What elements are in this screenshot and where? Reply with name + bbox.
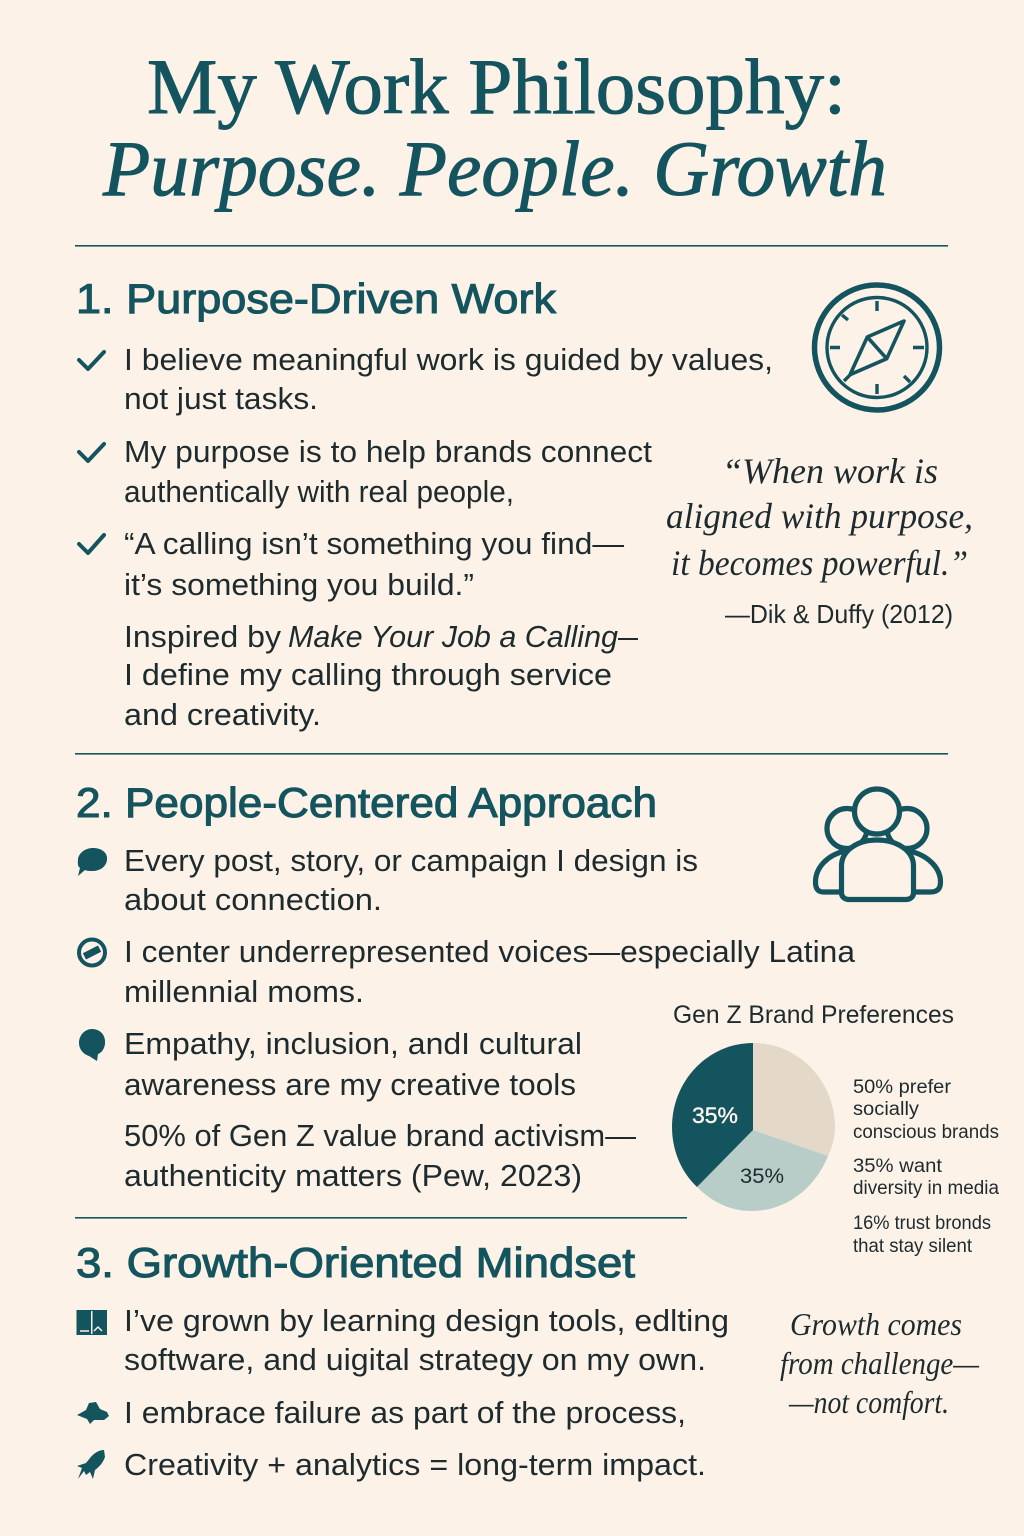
- callout: growth quote: [780, 1306, 979, 1420]
- text: bullet 3: [124, 526, 624, 602]
- text: bullet 1: [124, 342, 773, 416]
- pie label: white: 35%: [692, 1103, 738, 1128]
- legend: that stay silent: [853, 1236, 973, 1257]
- icon: book: [76, 1310, 107, 1335]
- legend: 16% trust bronds: [853, 1213, 991, 1234]
- text: bullet 3: “A calling isn’t something you find—: [124, 526, 624, 561]
- text: inspired by: [124, 619, 638, 732]
- text: bullet 1: not just tasks.: [124, 381, 318, 416]
- text: inspired by: —: [618, 619, 638, 654]
- icon: badge circle: [79, 940, 105, 966]
- icon: compass: [814, 285, 940, 410]
- chart: Gen Z brand preferences: [672, 1001, 999, 1257]
- heading: section 2: 2. People-Centered Approach: [76, 779, 657, 826]
- text: statistic: [124, 1118, 636, 1193]
- icon: plane: [77, 1402, 109, 1424]
- callout: growth quote: —not comfort.: [788, 1384, 949, 1420]
- icon: rocket: [77, 1450, 105, 1479]
- text: statistic: authenticity matters (Pew, 2023): [124, 1158, 582, 1193]
- callout: growth quote: Growth comes: [790, 1306, 962, 1342]
- icon: check 3: [79, 535, 104, 553]
- legend: conscious brands: [853, 1122, 999, 1143]
- icon: speech drop: [79, 1029, 105, 1061]
- text: bullet 2: I center underrepresented voices—especially Latina: [124, 934, 856, 969]
- text: bullet 2: My purpose is to help brands connect: [124, 434, 652, 469]
- callout: growth quote: from challenge—: [780, 1345, 979, 1381]
- icon: check 1: [79, 352, 104, 369]
- text: bullet 1: I’ve grown by learning design tools, edlting: [124, 1303, 729, 1338]
- callout: quote: [666, 451, 973, 629]
- text: bullet 1: [124, 1303, 729, 1377]
- pie slice: sage: [697, 1130, 828, 1211]
- heading: section 3: 3. Growth-Oriented Mindset: [76, 1239, 635, 1286]
- pie slice: teal: [672, 1043, 753, 1187]
- legend: 50% prefer: [853, 1077, 952, 1098]
- text: inspired by: and creativity.: [124, 697, 321, 732]
- callout: quote: “When work is: [722, 451, 938, 491]
- title: [102, 43, 887, 212]
- panel: people-centered approach: [76, 779, 999, 1257]
- text: inspired by: Inspired by: [124, 619, 282, 654]
- text: bullet 2: I embrace failure as part of the process,: [124, 1395, 686, 1430]
- text: bullet 1: I believe meaningful work is guided by values,: [124, 342, 773, 377]
- text: bullet 1: about connection.: [124, 882, 382, 917]
- text: bullet 3: Creativity + analytics = long-term impact.: [124, 1447, 706, 1482]
- text: bullet 2: millennial moms.: [124, 974, 364, 1009]
- text: bullet 3: Empathy, inclusion, andI cultural: [124, 1026, 582, 1061]
- icon: speech bubble: [78, 848, 107, 876]
- legend: socially: [853, 1099, 920, 1120]
- panel: purpose-driven work: [76, 275, 973, 732]
- legend: 35% want: [853, 1156, 943, 1177]
- text: bullet 2: [124, 934, 856, 1009]
- text: statistic: 50% of Gen Z value brand activism—: [124, 1118, 636, 1153]
- callout: quote: —Dik & Duffy (2012): [725, 599, 953, 629]
- text: bullet 1: [124, 843, 698, 917]
- text: bullet 2: authentically with real people,: [124, 474, 514, 509]
- callout: quote: it becomes powerful.”: [671, 543, 968, 583]
- text: bullet 2: [124, 434, 652, 509]
- panel: growth-oriented mindset: [76, 1239, 979, 1482]
- title: Purpose. People. Growth: [102, 125, 887, 212]
- text: bullet 3: awareness are my creative tools: [124, 1067, 576, 1102]
- text: bullet 1: software, and uigital strategy on my own.: [124, 1342, 706, 1377]
- title: My Work Philosophy:: [147, 43, 846, 130]
- legend: [853, 1077, 999, 1257]
- icon: people: [816, 789, 940, 900]
- pie slice: beige: [753, 1043, 835, 1156]
- text: bullet 3: it’s something you build.”: [124, 567, 474, 602]
- pie label: dark: 35%: [740, 1165, 784, 1188]
- icon: check 2: [79, 444, 104, 461]
- chart title: Gen Z Brand Preferences: [673, 1001, 954, 1029]
- text: bullet 3: [124, 1026, 582, 1102]
- text: bullet 1: Every post, story, or campaign I design is: [124, 843, 698, 878]
- callout: quote: aligned with purpose,: [666, 496, 973, 536]
- heading: section 1: 1. Purpose-Driven Work: [76, 275, 557, 322]
- legend: diversity in media: [853, 1178, 999, 1199]
- text: inspired by: I define my calling through service: [124, 657, 612, 692]
- text: inspired by: Make Your Job a Calling: [288, 619, 618, 654]
